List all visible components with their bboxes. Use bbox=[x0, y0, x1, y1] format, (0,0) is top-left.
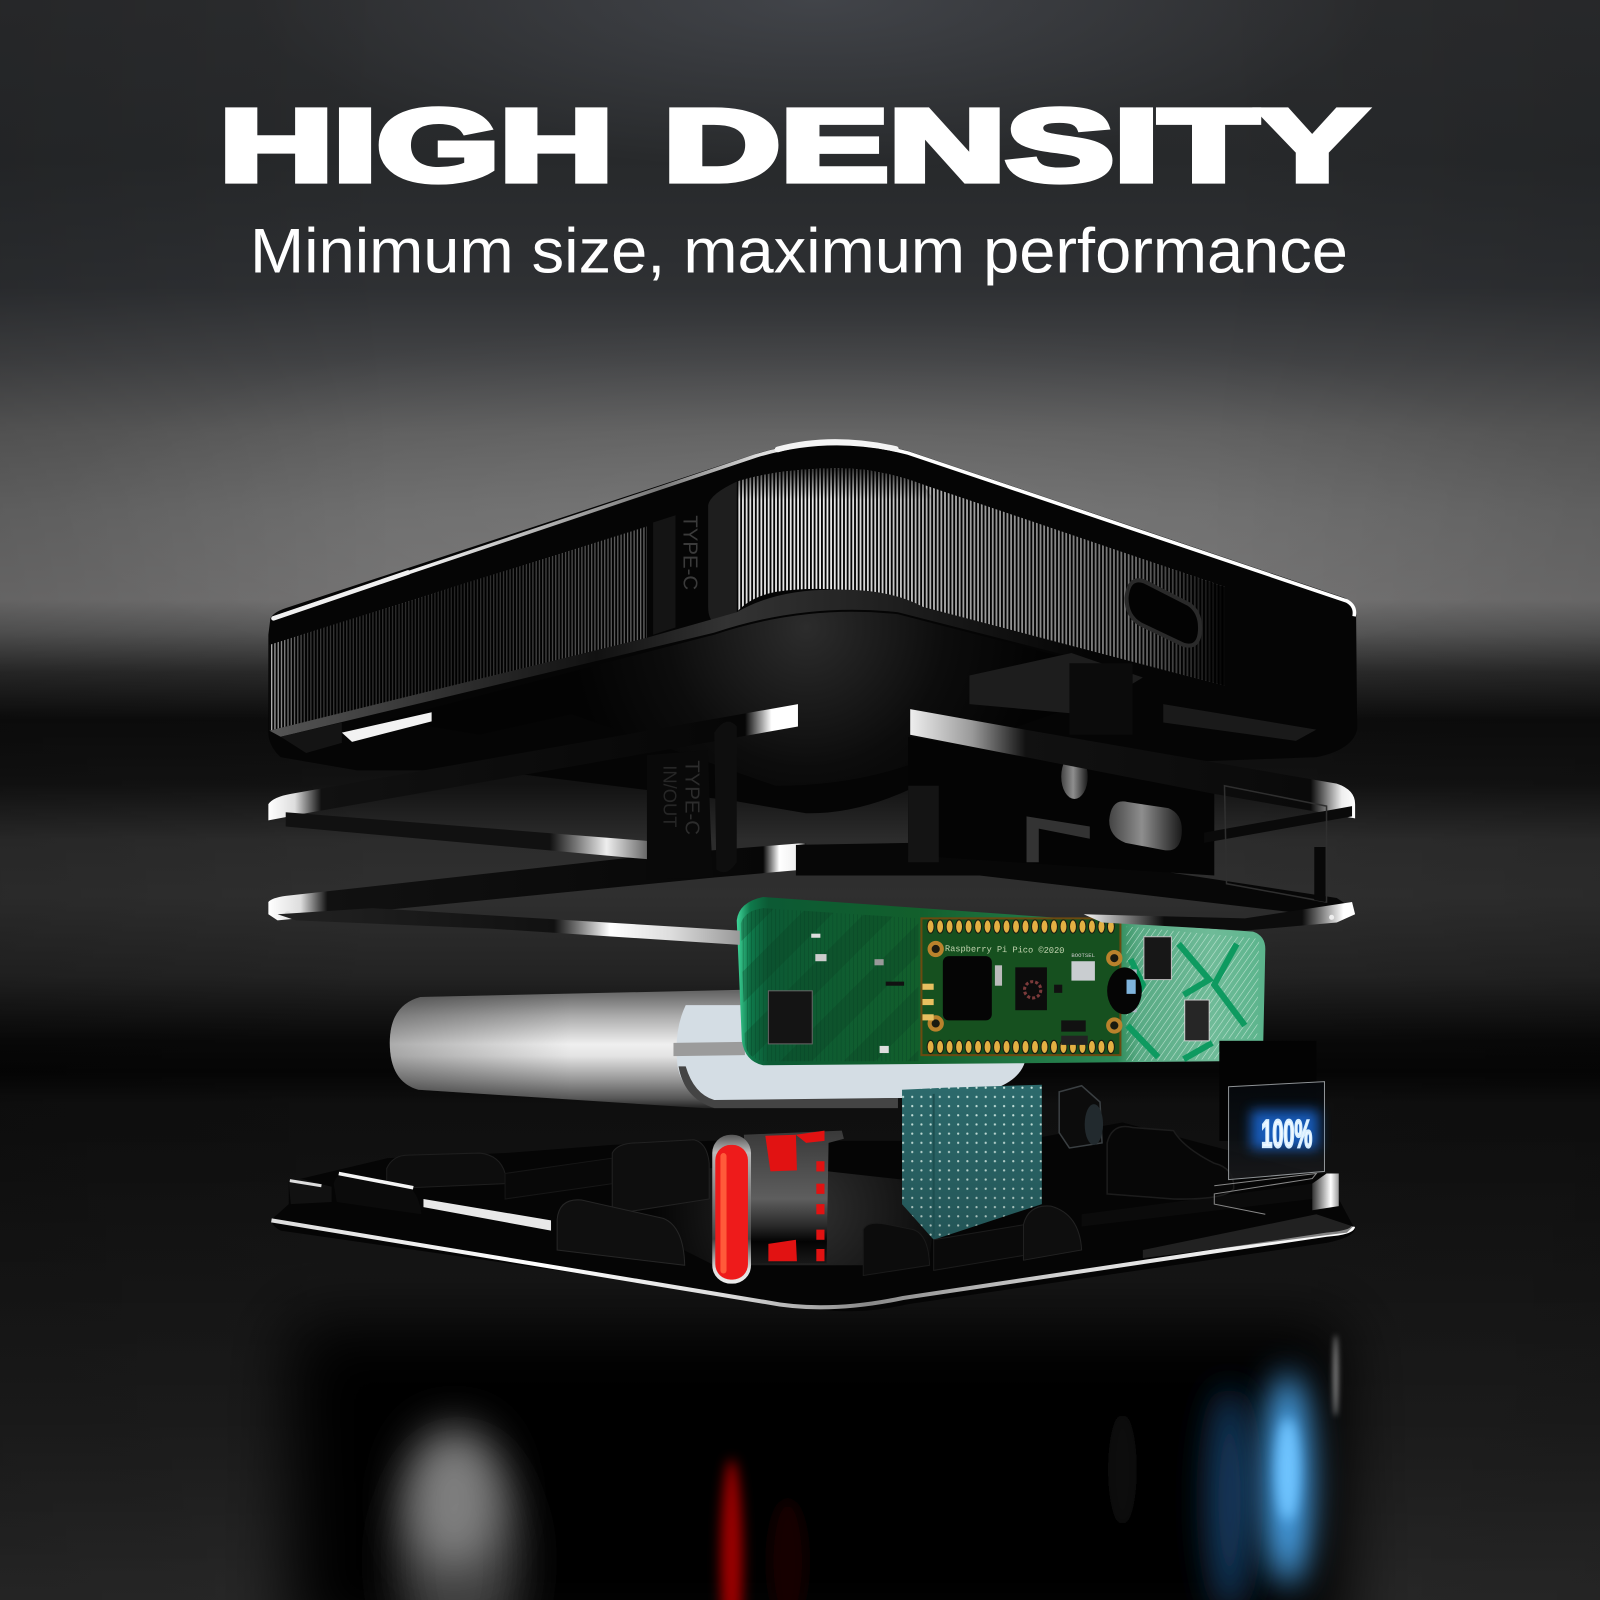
back wall clips bbox=[387, 1140, 709, 1214]
lower band bbox=[269, 590, 1357, 737]
right corner post bbox=[1312, 1173, 1339, 1210]
tray floor sheen bbox=[571, 1163, 939, 1265]
small board parts bbox=[811, 934, 904, 1053]
front left clips with highlights bbox=[289, 1173, 685, 1265]
inner wedge surfaces bbox=[969, 653, 1143, 714]
trace patterns bbox=[741, 908, 1259, 1061]
main processor bbox=[943, 956, 992, 1020]
central plate with embossed label bbox=[647, 722, 737, 880]
USB-C connector bbox=[712, 1131, 844, 1284]
glass foot bbox=[1214, 1173, 1316, 1214]
frame two: bars in front of board bbox=[278, 902, 1355, 945]
connector shell bbox=[712, 1135, 751, 1284]
board substrate bbox=[737, 897, 1265, 1065]
underside face bbox=[388, 612, 1143, 786]
central plate with embossed label: IN/OUT bbox=[659, 765, 680, 828]
flash chip bbox=[1015, 967, 1047, 1010]
teal inductor cube bbox=[902, 1085, 1042, 1240]
red contact pieces bbox=[765, 1131, 824, 1261]
display backing block bbox=[1219, 1041, 1316, 1141]
battery cell bbox=[390, 990, 1027, 1108]
glossy rim highlight bbox=[272, 444, 1354, 618]
crystal and passive parts bbox=[995, 965, 1088, 1045]
top shell bbox=[268, 442, 1357, 813]
light ledge bbox=[342, 712, 432, 742]
bottom rim highlight bbox=[271, 1220, 1353, 1307]
left ribbed face bbox=[269, 527, 647, 731]
clips in front of cube bbox=[863, 1206, 1082, 1276]
micro usb port bbox=[1107, 967, 1142, 1014]
right upper chip bbox=[1144, 937, 1171, 980]
battery display bbox=[1214, 1082, 1324, 1214]
left board chip bbox=[768, 991, 812, 1044]
gold header pads top row bbox=[927, 920, 1114, 933]
glass panel bbox=[1229, 1082, 1324, 1180]
side pads bbox=[922, 984, 934, 1020]
battery tab bbox=[673, 1042, 745, 1056]
display glow bbox=[1251, 1110, 1318, 1149]
pico module bbox=[921, 918, 1120, 1055]
right ribbed face bbox=[737, 468, 1224, 686]
bootsel button bbox=[1071, 952, 1096, 981]
right plate with cutouts bbox=[908, 737, 1214, 876]
title bbox=[219, 89, 1366, 203]
bottom tray bbox=[271, 1122, 1355, 1311]
board label: Raspberry Pi Pico ©2020 bbox=[945, 944, 1064, 956]
title: DENSITY bbox=[663, 89, 1366, 203]
red connector interior bbox=[715, 1145, 748, 1280]
subtitle: Minimum size, maximum performance bbox=[250, 216, 1348, 286]
floor shadow and reflections bbox=[291, 1321, 1342, 1600]
mounting holes bbox=[930, 943, 1120, 1032]
port divider with embossed label: TYPE-C bbox=[679, 515, 701, 590]
battery end cap bbox=[677, 1005, 1027, 1102]
frame one: upper middle ring bbox=[268, 704, 1355, 902]
gold header pads bottom row bbox=[927, 1040, 1114, 1054]
port divider with embossed label bbox=[653, 482, 737, 635]
right lower chip bbox=[1185, 1000, 1209, 1041]
oval slot bbox=[1127, 580, 1200, 646]
title: HIGH bbox=[219, 89, 613, 203]
bootsel button: BOOTSEL bbox=[1071, 952, 1096, 959]
frame two: lower middle ring bbox=[268, 842, 1352, 920]
circuit board bbox=[737, 897, 1265, 1065]
connector metal body bbox=[744, 1131, 844, 1263]
central plate with embossed label: TYPE-C bbox=[681, 760, 703, 835]
tray body bbox=[272, 1122, 1355, 1311]
tact switch and cable clip bbox=[1059, 1086, 1234, 1199]
display reading: 100% bbox=[1261, 1113, 1312, 1156]
shell silhouette bbox=[268, 442, 1357, 813]
